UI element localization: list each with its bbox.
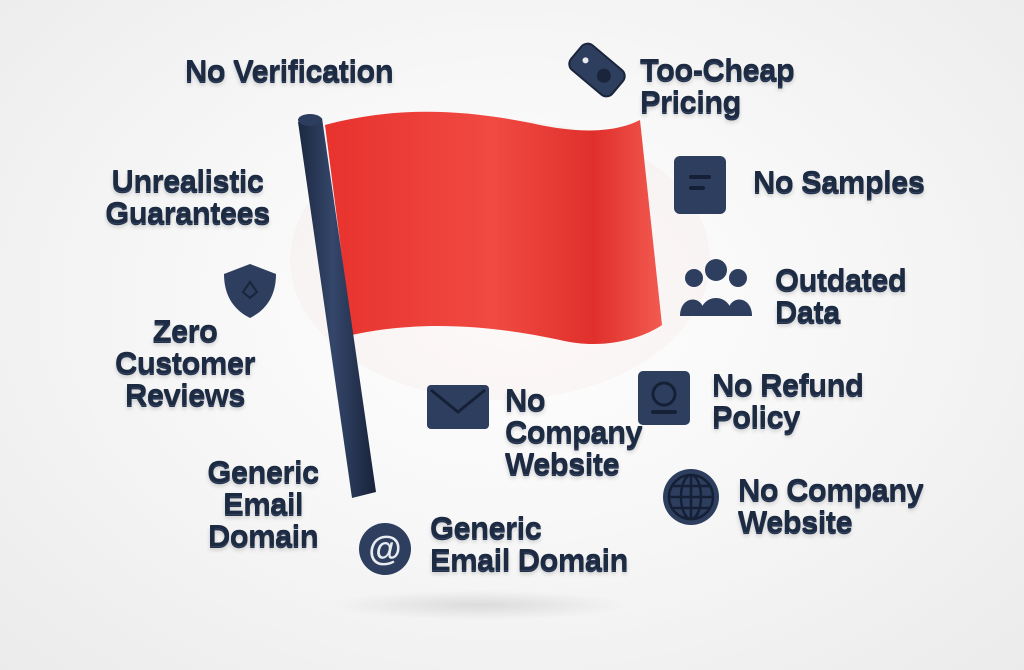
icon: shield — [224, 264, 276, 318]
label: Zero Customer Reviews: Reviews — [125, 377, 245, 412]
label: No Refund Policy — [712, 367, 864, 439]
label: Generic Email Domain (left): Domain — [208, 518, 318, 553]
icon: at sign: @ — [368, 530, 402, 568]
floor shadow — [330, 590, 630, 620]
label: Outdated Data: Outdated — [775, 262, 906, 297]
icon: document — [674, 156, 726, 214]
label: Generic Email Domain (left): Email — [223, 486, 303, 521]
label: No Verification: No Verification — [185, 53, 393, 88]
icon: at sign — [359, 523, 411, 575]
label: Too-Cheap Pricing — [640, 52, 795, 124]
label: No Company Website (right) — [737, 472, 924, 539]
label: Too-Cheap Pricing: Too-Cheap — [640, 52, 794, 87]
icon: people — [680, 259, 752, 316]
icon: envelope — [427, 385, 489, 429]
label: Too-Cheap Pricing: Pricing — [640, 84, 741, 119]
label: No Company Website (center): Company — [505, 414, 642, 449]
label: No Refund Policy: No Refund — [712, 367, 863, 402]
label: Unrealistic Guarantees: Guarantees — [105, 195, 270, 230]
label: Zero Customer Reviews: Zero — [153, 313, 217, 348]
label: No Company Website (right): Website — [738, 504, 852, 539]
label: No Company Website (right): No Company — [738, 472, 923, 507]
label: Unrealistic Guarantees: Unrealistic — [112, 163, 263, 198]
icon: globe — [663, 469, 719, 525]
label: No Company Website (center): No — [505, 382, 545, 417]
label: No Refund Policy: Policy — [712, 399, 800, 434]
label: Unrealistic Guarantees — [105, 163, 270, 230]
label: Generic Email Domain (left) — [207, 454, 319, 553]
label: Zero Customer Reviews: Customer — [115, 345, 255, 380]
label: Generic Email Domain (bottom): Email Domain — [430, 542, 628, 577]
label: Generic Email Domain (left): Generic — [207, 454, 319, 489]
label: No Company Website (center): Website — [505, 446, 619, 481]
icon: price tag — [568, 42, 626, 98]
label: Zero Customer Reviews — [114, 313, 256, 412]
label: Generic Email Domain (bottom): Generic — [430, 510, 541, 545]
label: Outdated Data — [774, 262, 906, 329]
label: No Company Website (center) — [504, 382, 643, 481]
icon: safe — [638, 371, 690, 425]
label: No Samples: No Samples — [753, 164, 924, 199]
label: Outdated Data: Data — [775, 294, 840, 329]
label: Generic Email Domain (bottom) — [430, 510, 628, 577]
